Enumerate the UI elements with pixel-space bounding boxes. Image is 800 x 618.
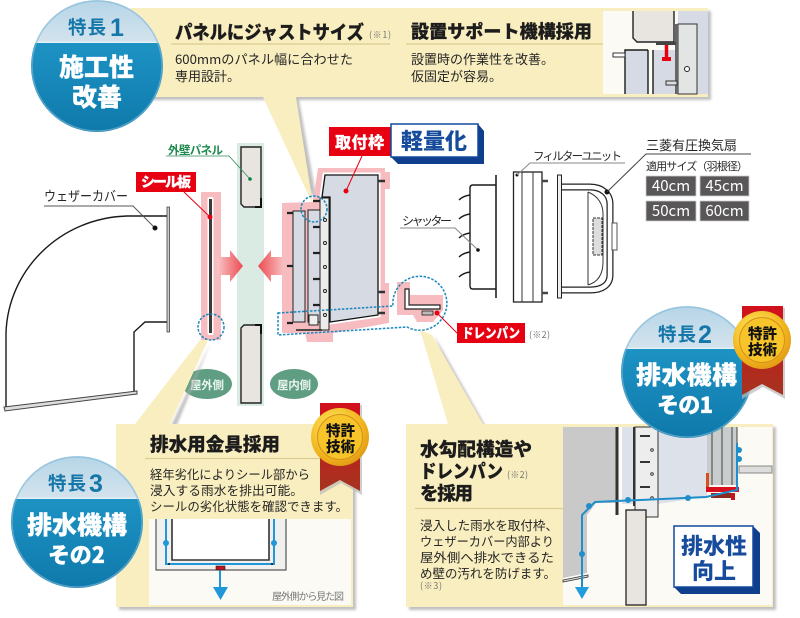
image: drainage cross-section <box>563 427 772 605</box>
text: support body <box>411 49 554 85</box>
panel: feature 1 callout <box>130 8 711 207</box>
callout: improved drainage: 向上 <box>692 554 736 586</box>
heading: drain fitting: 排水用金具採用 <box>150 431 280 457</box>
heading: support mechanism: 設置サポート機構採用 <box>411 18 592 44</box>
size chip 40cm: 40cm <box>652 175 690 196</box>
drain pan: ドレンパン <box>462 322 520 342</box>
badge: patent ribbon left <box>311 403 369 495</box>
label: filter unit: フィルターユニット <box>533 148 622 164</box>
badge: feature 3: 排水機構 <box>27 506 127 542</box>
heading: slope structure and drain pan: (※2) <box>507 468 528 481</box>
label: mounting frame <box>329 127 391 156</box>
badge: feature 3: その2 <box>48 538 105 570</box>
badge: feature 2: 特長 <box>658 321 696 347</box>
heading: slope structure and drain pan: ドレンパン <box>420 458 503 484</box>
badge: feature 2 <box>621 306 753 438</box>
label: shutter: シャッター <box>402 212 452 229</box>
badge: feature 2: その1 <box>657 388 713 420</box>
label: applicable sizes: 適用サイズ（羽根径） <box>646 158 748 174</box>
callout: improved drainage: 排水性 <box>681 529 747 561</box>
text: just size body: 専用設計。 <box>175 66 240 85</box>
image: support mechanism detail <box>603 11 708 94</box>
badge: patent ribbon right: 技術 <box>748 339 778 360</box>
badge: feature 1: 施工性 <box>59 48 134 84</box>
label: fan name: 三菱有圧換気扇 <box>646 135 737 154</box>
image: view from outside <box>149 519 351 605</box>
text: support body: 設置時の作業性を改善。 <box>411 49 554 68</box>
label: indoor side <box>270 369 318 399</box>
label: weather cover: ウェザーカバー <box>44 185 128 205</box>
text: just size body <box>175 49 353 85</box>
mounting frame <box>282 127 391 342</box>
size chip 45cm: 45cm <box>705 175 744 196</box>
size chip 60cm: 60cm <box>705 200 744 221</box>
badge: feature 3: 3 <box>89 470 103 498</box>
callout: improved drainage <box>674 526 760 594</box>
text: drain fitting body: 経年劣化によりシール部から <box>150 464 310 483</box>
label: outdoor side: 屋外側 <box>190 377 224 393</box>
badge: patent ribbon left: 特許 <box>326 420 356 441</box>
label: indoor side: 屋内側 <box>277 377 311 393</box>
ventilation fan <box>558 135 751 298</box>
text: support body: 仮固定が容易。 <box>411 66 502 85</box>
label: outdoor side <box>182 369 232 399</box>
text: drain fitting body: 浸入する雨水を排出可能。 <box>150 480 303 499</box>
heading: slope structure and drain pan <box>420 436 532 506</box>
shutter <box>400 175 496 298</box>
exterior wall panel <box>166 142 264 406</box>
heading: slope structure and drain pan: を採用 <box>420 480 473 506</box>
text: drainage body: め壁の汚れを防げます。 <box>420 563 556 582</box>
heading: slope structure and drain pan: 水勾配構造や <box>420 436 532 462</box>
badge: feature 2: 排水機構 <box>636 356 737 392</box>
label: drain pan <box>457 323 525 343</box>
text: drainage body: (※3) <box>420 579 442 592</box>
callout: lightweight: 軽量化 <box>401 124 467 156</box>
panel: feature 2 callout <box>406 330 776 610</box>
label: exterior wall panel: 外壁パネル <box>168 142 224 158</box>
seal plate: シール板 <box>141 172 191 192</box>
weather cover diagram <box>4 185 170 411</box>
badge: patent ribbon left: 技術 <box>326 436 356 457</box>
note 1: (※1) <box>369 28 391 41</box>
badge: feature 1 <box>31 0 163 132</box>
seal plate <box>136 172 224 340</box>
text: drainage body: 屋外側へ排水できるた <box>420 547 554 566</box>
label: seal plate <box>136 172 196 192</box>
badge: feature 1: 1 <box>110 14 124 42</box>
badge: feature 1: 改善 <box>72 78 122 114</box>
filter unit <box>514 148 625 302</box>
badge: patent ribbon right: 特許 <box>748 323 778 344</box>
badge: feature 2: 2 <box>698 321 712 349</box>
text: drainage body: 浸入した雨水を取付枠、 <box>420 515 558 534</box>
badge: patent ribbon right <box>733 306 791 399</box>
badge: feature 3 <box>11 456 143 588</box>
badge: feature 1: 特長 <box>68 14 106 40</box>
arrow: right <box>258 250 285 282</box>
note 2: (※2) <box>529 328 550 341</box>
badge: feature 3: 特長 <box>48 470 86 496</box>
panel: feature 3 callout <box>116 340 356 610</box>
text: drainage body: ウェザーカバー内部より <box>420 531 554 550</box>
text: just size body: 600mmのパネル幅に合わせた <box>175 49 353 68</box>
caption: 屋外側から見た図 <box>272 588 344 603</box>
text: drain fitting body <box>150 464 348 515</box>
arrow: left <box>217 250 243 282</box>
size chip 50cm: 50cm <box>652 200 690 221</box>
drain pan <box>278 276 550 343</box>
text: drain fitting body: シールの劣化状態を確認できます。 <box>150 496 348 515</box>
text: drainage body <box>420 515 558 592</box>
heading: just size: パネルにジャストサイズ <box>175 19 364 45</box>
callout: lightweight <box>391 124 484 164</box>
mounting frame: 取付枠 <box>335 129 384 153</box>
